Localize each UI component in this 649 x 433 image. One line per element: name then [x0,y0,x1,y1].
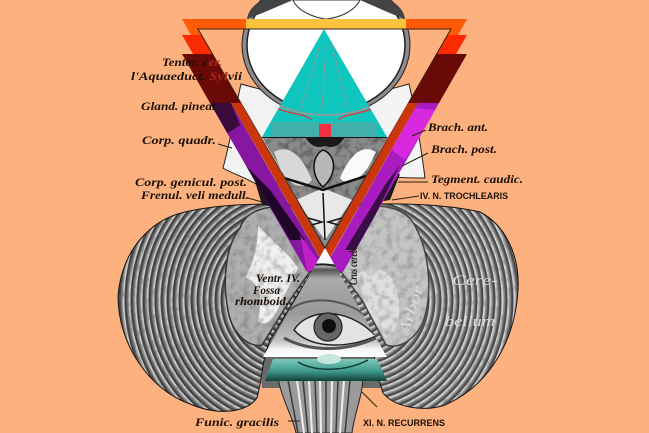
left anatomical labels: Gland. pineal. [141,99,219,113]
cerebellum labels: Cere- [452,273,498,289]
left anatomical labels: l'Aquaeduct. Sylvii [131,69,243,83]
purple band right [325,103,439,272]
fourth ventricle labels: Fossa [252,283,280,297]
red-orange V stripe right [325,103,418,266]
orange band [182,19,467,35]
purple band left [210,103,325,272]
cerebellum left lobe [118,204,325,411]
eye white [294,314,376,345]
red-orange V stripe left [231,103,325,266]
teal lower trapezoid [265,354,387,381]
fourth ventricle labels: Ventr. IV. [256,271,300,285]
collage illustration [118,0,522,433]
left anatomical labels: Frenul. veli medull. [140,188,249,202]
dark red band [182,54,467,103]
yellow band across globe [246,19,406,29]
leader lines [218,130,428,421]
midbrain side lobes [223,84,425,208]
inner triangle outline [198,29,451,248]
left anatomical labels: Corp. genicul. post. [135,175,247,189]
eye globe at top [242,0,410,116]
spinal cord [278,378,363,433]
right anatomical labels: Tegment. caudic. [431,172,523,186]
bottom labels: Funic. gracilis [194,415,279,429]
right anatomical labels: IV. N. TROCHLEARIS [420,191,508,202]
teal triangle [262,29,388,137]
left anatomical labels: Corp. quadr. [142,133,216,147]
left anatomical labels [131,55,249,202]
right anatomical labels [420,120,523,202]
cerebellum labels: bellum [445,314,495,330]
left anatomical labels: Tentor. c er. [162,55,222,69]
central brain stem [262,137,388,249]
teal triangle base line [262,136,387,138]
pupil [322,319,336,333]
bottom labels [194,415,445,429]
cerebellum labels [346,247,498,338]
fourth ventricle labels: rhomboid. [235,294,289,308]
right anatomical labels: Brach. ant. [427,120,488,134]
right white matter [325,206,429,346]
cerebellum labels: Crus cereb. [346,247,360,285]
right anatomical labels: Brach. post. [430,142,497,156]
foliage texture [118,204,320,411]
left white matter [225,206,325,345]
iris [314,313,342,341]
red band [182,35,467,54]
fourth ventricle labels [235,271,300,308]
purple band shading [210,103,436,272]
eye triangle [263,248,387,357]
lens [293,0,360,19]
cerebellum labels: Arbor [396,284,427,338]
bottom labels: XI. N. RECURRENS [363,418,445,429]
cerebellum right lobe [325,204,518,408]
medial cerebellum underlay [258,203,392,388]
foliage texture right [330,204,516,408]
